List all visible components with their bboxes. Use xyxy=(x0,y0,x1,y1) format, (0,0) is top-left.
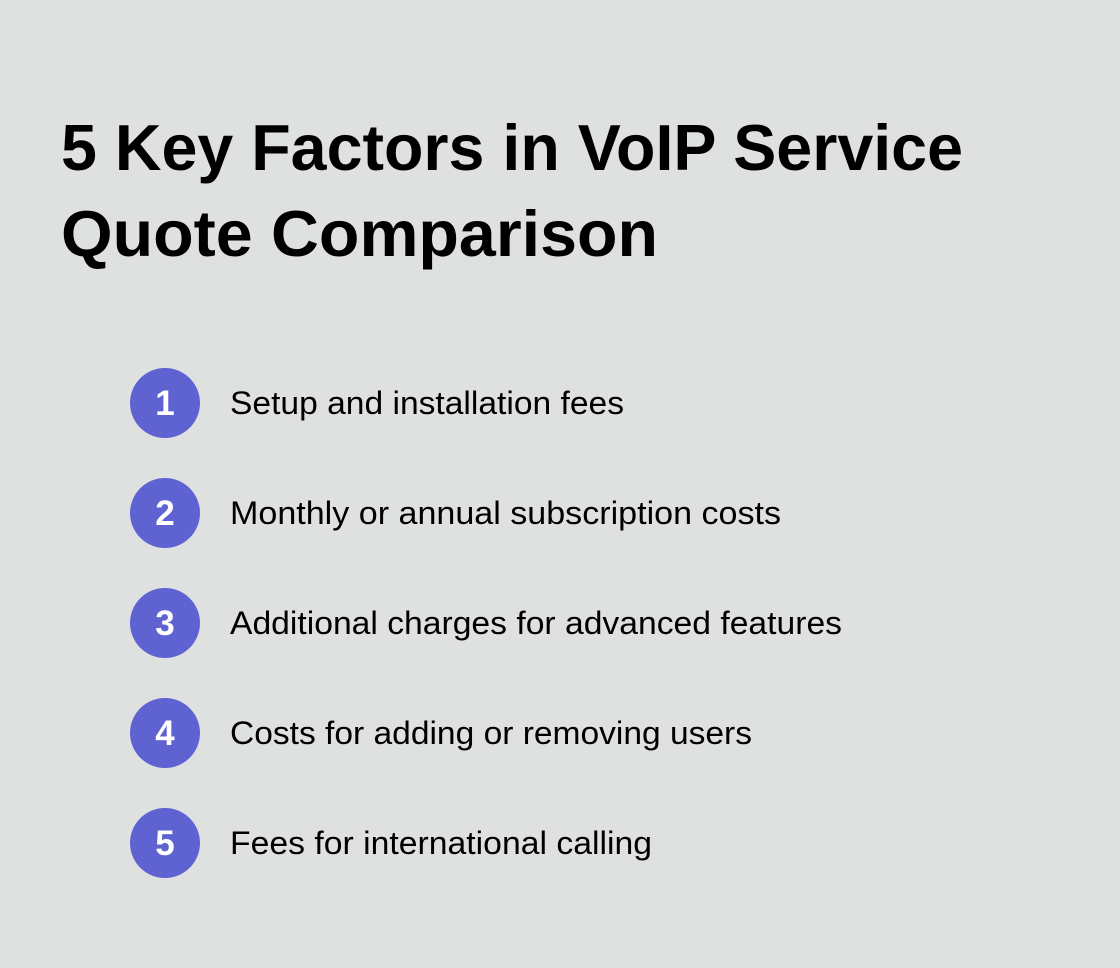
item 1: setup fees xyxy=(130,368,624,438)
item 4: adding or removing users: Costs for adding or removing users xyxy=(230,715,752,751)
item 2: subscription costs xyxy=(130,478,781,548)
item 4: adding or removing users xyxy=(130,698,752,768)
item 1: setup fees: 1 xyxy=(155,384,175,423)
item 1: setup fees: Setup and installation fees xyxy=(230,385,624,421)
item 2: subscription costs: Monthly or annual subscription costs xyxy=(230,495,781,531)
item 2: subscription costs: 2 xyxy=(155,494,175,533)
item 5: international calling: 5 xyxy=(155,824,175,863)
title: Quote Comparison xyxy=(61,197,658,270)
item 5: international calling: Fees for international calling xyxy=(230,825,652,861)
item 5: international calling xyxy=(130,808,652,878)
item 3: advanced features xyxy=(130,588,842,658)
title xyxy=(61,111,963,270)
title: 5 Key Factors in VoIP Service xyxy=(61,111,963,184)
list of factors xyxy=(130,368,842,878)
item 3: advanced features: 3 xyxy=(155,604,175,643)
item 4: adding or removing users: 4 xyxy=(155,714,175,753)
item 3: advanced features: Additional charges for advanced features xyxy=(230,605,842,641)
